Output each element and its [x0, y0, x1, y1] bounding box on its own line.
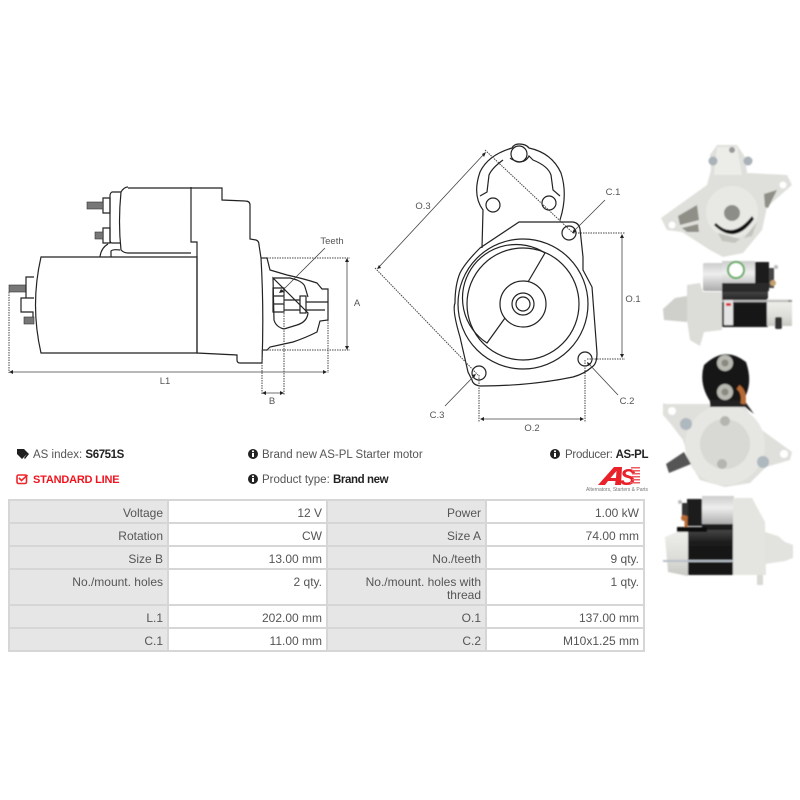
logo: AS-PL [586, 464, 648, 493]
specification table: No./mount. holes [72, 575, 163, 589]
specification table: 202.00 mm [262, 611, 322, 625]
front view labels: C.3 [430, 410, 444, 421]
front view dimensions [375, 150, 625, 422]
specification table [8, 499, 645, 652]
specification table: 11.00 mm [270, 634, 322, 648]
front view labels: C.1 [606, 187, 620, 198]
standard line: STANDARD LINE [33, 474, 119, 486]
photo: top side of starter [663, 261, 792, 346]
specification table: 1 qty. [611, 575, 639, 589]
specification table: Voltage [123, 506, 163, 520]
side view drawing of starter motor [9, 187, 328, 363]
specification table: C.1 [144, 634, 163, 648]
AS index: AS index: S6751S [33, 449, 124, 461]
specification table: CW [302, 529, 322, 543]
specification table: O.1 [462, 611, 481, 625]
specification table: Size A [447, 529, 481, 543]
side view labels [160, 236, 361, 407]
specification table: No./teeth [432, 552, 481, 566]
side view labels: L1 [160, 376, 170, 387]
front view labels [415, 187, 641, 434]
icon: tags [17, 449, 29, 459]
photo: bottom side of starter [663, 496, 793, 585]
front view labels: O.1 [625, 294, 641, 305]
specification table: M10x1.25 mm [563, 634, 639, 648]
icon: info brand [248, 449, 258, 459]
side view labels: B [269, 396, 275, 407]
side view labels: A [354, 298, 361, 309]
side view dimensions [9, 248, 350, 395]
logo: AS-PL: S [620, 464, 636, 490]
specification table: 74.00 mm [586, 529, 639, 543]
specification table: Rotation [118, 529, 163, 543]
specification table: C.2 [462, 634, 481, 648]
specification table: No./mount. holes with thread [366, 575, 481, 602]
specification table: Power [447, 506, 481, 520]
producer: Producer: AS-PL [565, 449, 648, 461]
specification table: 137.00 mm [579, 611, 639, 625]
front view drawing of starter motor [454, 144, 597, 386]
front view labels: O.3 [415, 201, 431, 212]
specification table: 1.00 kW [595, 506, 639, 520]
specification table: 12 V [297, 506, 322, 520]
specification table: 2 qty. [294, 575, 322, 589]
icon: info producer [550, 449, 560, 459]
front view labels: O.2 [524, 423, 540, 434]
specification table: Size B [128, 552, 163, 566]
brand note: Brand new AS-PL Starter motor [262, 449, 423, 461]
icon: red checkbox [17, 475, 28, 484]
logo: AS-PL: Alternators, Starters & Parts [586, 487, 648, 493]
specification table: L.1 [146, 611, 163, 625]
photo: rear of starter [663, 354, 792, 487]
icon: info type [248, 474, 258, 484]
front view labels: C.2 [620, 396, 634, 407]
specification table: 9 qty. [611, 552, 639, 566]
side view labels: Teeth [320, 236, 344, 247]
specification table: 13.00 mm [269, 552, 322, 566]
photo: front of starter [661, 145, 792, 257]
product type: Product type: Brand new [262, 474, 388, 486]
